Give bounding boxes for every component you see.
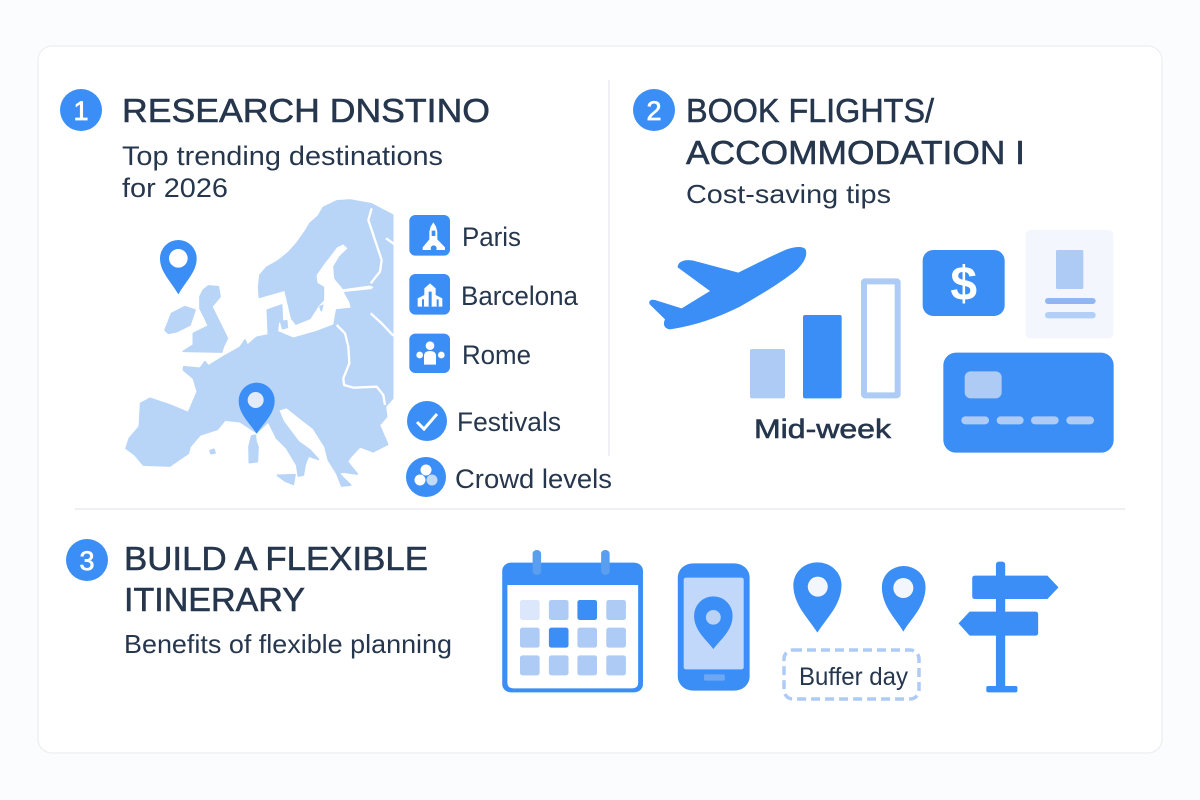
bar chart: mid-week prices [750,281,898,398]
heading: flexible itinerary: BUILD A FLEXIBLE [124,540,428,577]
itinerary illustrations [502,550,1059,692]
step number 3 [66,539,108,581]
icon: airplane [649,247,806,329]
subheading: cost saving tips: Cost-saving tips [686,179,891,209]
heading: flexible itinerary [124,540,428,618]
icon: Paris [409,215,450,256]
icon: document [1026,230,1113,338]
heading: book flights: BOOK FLIGHTS/ [686,92,935,129]
icon: calendar [502,550,643,692]
icon: Barcelona [409,274,450,315]
panel: book flights and accommodation [633,89,1114,453]
panel: research destinations [60,89,612,497]
label: Paris: Paris [462,222,521,252]
icon: Rome [409,334,450,373]
icon: signpost [959,562,1059,692]
list: destinations and factors [406,215,612,497]
icon: credit card [943,353,1114,453]
heading: flexible itinerary: ITINERARY [124,581,305,618]
step number 2: 2 [646,96,662,126]
heading: book flights: ACCOMMODATION I [686,134,1025,171]
icon: phone with pin [678,563,750,691]
label: mid-week: Mid-week [754,414,892,444]
map pin: west [160,240,197,294]
icon: festivals check [407,401,447,441]
label: festivals: Festivals [457,407,561,437]
icon: dollar tag [923,250,1005,316]
icon: location pins [793,562,926,633]
callout: buffer day: Buffer day [799,663,908,691]
heading: book flights [686,92,1025,171]
step number 2 [633,89,675,131]
icon: dollar tag: $ [950,258,977,311]
step number 1: 1 [73,96,89,126]
subheading: trending destinations: for 2026 [122,173,228,203]
callout: buffer day [784,650,919,699]
map pin: Italy [239,383,275,434]
icon: crowd levels [406,457,446,497]
subheading: trending destinations: Top trending destinations [122,141,443,171]
label: Rome: Rome [462,340,531,370]
flight illustrations [649,230,1114,453]
map of Europe [126,200,394,486]
step number 3: 3 [79,546,95,576]
subheading: trending destinations [122,141,443,203]
subheading: benefits: Benefits of flexible planning [124,629,452,659]
label: Barcelona: Barcelona [461,281,579,311]
panel: flexible itinerary [66,539,1059,699]
step number 1 [60,89,102,131]
label: crowd levels: Crowd levels [455,464,612,494]
heading: research: RESEARCH DNSTINO [122,92,490,129]
